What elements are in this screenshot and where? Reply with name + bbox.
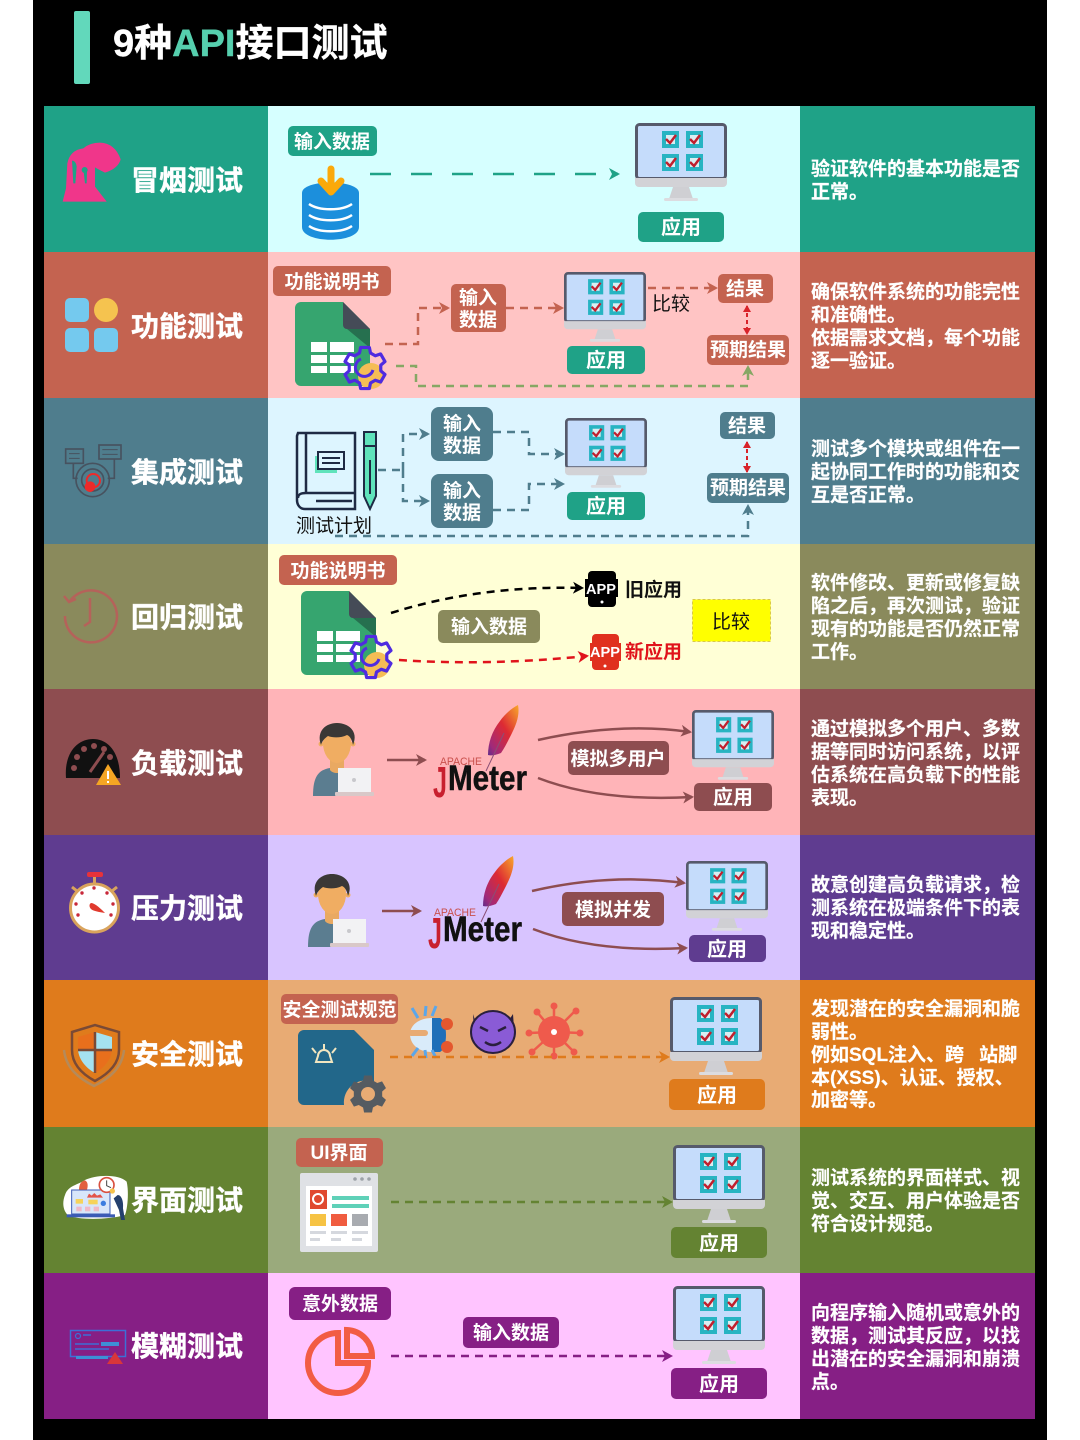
heading: 界面测试 xyxy=(131,1185,243,1216)
description: 现和稳定性。 xyxy=(811,919,925,942)
icon: security doc xyxy=(298,1030,386,1112)
icon: virus xyxy=(526,1002,584,1060)
icon: monitor xyxy=(673,1146,765,1223)
label: 应用: 应用 xyxy=(586,494,626,518)
logo: Apache JMeter: APACHE xyxy=(440,756,482,768)
icon: monitor xyxy=(565,419,647,488)
label: 意外数据 xyxy=(289,1287,391,1320)
label: 输入数据 1: 输入 xyxy=(443,412,481,435)
icon: bug xyxy=(408,1006,453,1058)
label: 应用: 应用 xyxy=(586,348,626,372)
row: 冒烟测试 xyxy=(44,106,1035,252)
arrow: spec to expected xyxy=(396,366,748,386)
icon: monitor xyxy=(670,998,762,1075)
label: 预期结果 xyxy=(707,335,789,365)
label: 输入数据 xyxy=(463,1317,559,1348)
icon: new app phone xyxy=(590,634,621,670)
description: 现有的功能是否仍然正常 xyxy=(811,617,1020,640)
description: 例如SQL注入、跨 站脚 xyxy=(811,1045,1017,1066)
label: 预期结果 xyxy=(707,473,789,503)
logo: Apache JMeter: J xyxy=(433,758,447,807)
label: 应用: 应用 xyxy=(661,215,701,239)
icon: monitor xyxy=(692,711,774,780)
icon: gauge with warning xyxy=(66,739,121,785)
label: 模拟并发 xyxy=(562,892,664,926)
icon: monitor xyxy=(635,124,727,201)
label: 模拟多用户 xyxy=(568,741,669,775)
arrow xyxy=(391,1355,671,1357)
arrow: app to result xyxy=(648,287,716,289)
row: 集成测试 xyxy=(44,398,1035,544)
arrow: input to app xyxy=(506,307,562,309)
heading: 负载测试 xyxy=(131,748,243,779)
arrow: plan branches xyxy=(378,434,428,501)
label: UI界面 xyxy=(296,1138,383,1167)
description: 测试多个模块或组件在一 xyxy=(811,437,1020,460)
label: 输入数据 2 xyxy=(431,474,493,528)
icon: old app phone: APP xyxy=(586,581,616,598)
logo: Apache JMeter xyxy=(433,705,527,807)
label: 输入数据: 输入 xyxy=(459,286,497,309)
label: 输入数据 xyxy=(451,284,506,332)
arrow xyxy=(370,173,618,175)
label: 输入数据: 输入数据 xyxy=(473,1321,549,1344)
icon: clock rewind xyxy=(64,590,117,642)
icon: integration xyxy=(66,445,121,497)
description: 逐一验证。 xyxy=(811,349,906,372)
arrow: compare xyxy=(746,442,748,472)
row: 负载测试 xyxy=(44,689,1035,835)
arrow xyxy=(390,1056,668,1058)
row: 界面测试 xyxy=(44,1127,1035,1273)
icon: user with laptop xyxy=(313,723,374,796)
description: 加密等。 xyxy=(811,1088,887,1111)
arrow: to new app xyxy=(399,656,587,662)
label: 应用 xyxy=(671,1227,767,1258)
description: 弱性。 xyxy=(811,1021,868,1043)
label: 结果 xyxy=(720,412,775,439)
label: 应用 xyxy=(638,212,724,242)
row: 安全测试 xyxy=(44,980,1035,1127)
label: 意外数据: 意外数据 xyxy=(302,1292,378,1315)
icon: old app phone xyxy=(585,571,618,607)
heading: 冒烟测试 xyxy=(131,165,243,196)
label: 结果: 结果 xyxy=(728,415,766,437)
description: 数据，测试其反应，以找 xyxy=(811,1324,1020,1347)
icon: blocks xyxy=(65,298,118,352)
logo: Apache JMeter: APACHE xyxy=(434,907,476,919)
label: 应用 xyxy=(689,935,766,962)
description: 依据需求文档，每个功能 xyxy=(811,326,1020,349)
description: 出潜在的安全漏洞和崩溃 xyxy=(811,1347,1020,1370)
logo: Apache JMeter: Meter xyxy=(448,759,527,798)
description: 验证软件的基本功能是否 xyxy=(811,157,1020,180)
label: 应用 xyxy=(567,492,645,520)
icon: shield xyxy=(64,1025,124,1086)
label: 模拟并发: 模拟并发 xyxy=(575,898,651,921)
label: 安全测试规范 xyxy=(281,994,398,1024)
description: 发现潜在的安全漏洞和脆 xyxy=(811,997,1020,1020)
label: 应用 xyxy=(671,1368,767,1399)
description: 软件修改、更新或修复缺 xyxy=(811,571,1020,594)
label: 旧应用: 旧应用 xyxy=(625,578,682,601)
icon: user with laptop xyxy=(308,874,369,947)
arrow: spec to input xyxy=(385,308,448,344)
icon: pie chart xyxy=(308,1330,372,1393)
arrow: user to JMeter xyxy=(382,910,420,912)
description: 互是否正常。 xyxy=(811,484,925,506)
heading: 安全测试 xyxy=(131,1039,243,1070)
heading: 集成测试 xyxy=(131,457,243,488)
description: 通过模拟多个用户、多数 xyxy=(811,717,1020,740)
label: 测试计划: 测试计划 xyxy=(296,515,372,537)
heading: 回归测试 xyxy=(131,602,243,633)
logo: Apache JMeter: Meter xyxy=(443,910,522,949)
description: 测试系统的界面样式、视 xyxy=(811,1166,1020,1189)
description: 陷之后，再次测试，验证 xyxy=(811,594,1020,617)
arrow: user to JMeter xyxy=(387,759,425,761)
description: 本(XSS)、认证、授权、 xyxy=(811,1067,1014,1089)
icon: smoking factory xyxy=(63,143,121,202)
label: 功能说明书 xyxy=(273,266,391,296)
arrow: to old app xyxy=(391,588,582,613)
description: 觉、交互、用户体验是否 xyxy=(811,1189,1020,1212)
description: 估系统在高负载下的性能 xyxy=(811,763,1020,786)
arrow: lower path xyxy=(538,778,692,798)
label: 应用 xyxy=(694,783,772,811)
description: 和准确性。 xyxy=(811,304,906,326)
label: 应用 xyxy=(669,1079,765,1110)
label: 结果 xyxy=(718,274,773,303)
arrow: compare xyxy=(746,306,748,334)
label: 应用: 应用 xyxy=(697,1083,737,1107)
icon: database xyxy=(302,169,359,240)
label: 比较: 比较 xyxy=(712,611,750,633)
description: 符合设计规范。 xyxy=(811,1213,944,1235)
title text: 9种API接口测试 xyxy=(113,23,388,65)
description: 起协同工作时的功能和交 xyxy=(811,460,1020,483)
label: 应用: 应用 xyxy=(699,1372,739,1396)
icon: title accent bar xyxy=(74,11,90,84)
label: 输入数据: 输入数据 xyxy=(294,130,370,153)
label: 模拟多用户: 模拟多用户 xyxy=(570,747,666,770)
row: 压力测试 xyxy=(44,835,1035,980)
icon: spec sheet xyxy=(301,591,391,678)
description: 测系统在极端条件下的表 xyxy=(811,896,1020,919)
arrow: lower path xyxy=(533,929,686,949)
title xyxy=(74,11,388,84)
arrow: plan to expected xyxy=(335,506,748,536)
arrow: upper path xyxy=(532,879,684,891)
description: 向程序输入随机或意外的 xyxy=(811,1301,1020,1324)
label: 输入数据 1 xyxy=(431,407,493,461)
icon: test plan book xyxy=(297,432,376,509)
icon: monitor xyxy=(564,273,646,342)
heading: 功能测试 xyxy=(131,311,243,342)
arrow xyxy=(391,1201,671,1203)
icon: stopwatch xyxy=(70,872,118,932)
label: 比较 xyxy=(692,600,770,642)
label: 预期结果: 预期结果 xyxy=(710,339,786,361)
label: 安全测试规范: 安全测试规范 xyxy=(282,998,396,1021)
label: 输入数据 xyxy=(438,610,540,643)
arrow: upper path xyxy=(538,728,690,740)
description: 故意创建高负载请求，检 xyxy=(811,873,1020,896)
label: 预期结果: 预期结果 xyxy=(710,477,786,499)
row: 模糊测试 xyxy=(44,1273,1035,1419)
icon: monitor xyxy=(686,862,768,931)
label: 功能说明书 xyxy=(279,555,397,585)
icon: new app phone: APP xyxy=(590,644,620,661)
heading: 压力测试 xyxy=(131,893,243,924)
label: 输入数据: 数据 xyxy=(459,309,497,331)
label: 输入数据 1: 数据 xyxy=(443,435,481,457)
label: 输入数据: 输入数据 xyxy=(451,615,527,638)
description: 表现。 xyxy=(811,787,868,809)
icon: UI laptop xyxy=(63,1176,128,1220)
label: 比较: 比较 xyxy=(652,293,690,315)
row: 功能测试 xyxy=(44,252,1035,398)
label: 应用: 应用 xyxy=(713,785,753,809)
arrow: inputs to app xyxy=(493,432,563,510)
label: 新应用: 新应用 xyxy=(625,640,682,663)
heading: 模糊测试 xyxy=(131,1331,243,1362)
label: 功能说明书: 功能说明书 xyxy=(290,560,386,582)
label: 功能说明书: 功能说明书 xyxy=(284,271,380,293)
label: 结果: 结果 xyxy=(726,278,764,300)
label: 输入数据 2: 数据 xyxy=(443,502,481,524)
logo: Apache JMeter xyxy=(428,856,522,958)
description: 工作。 xyxy=(811,641,868,663)
icon: monitor xyxy=(673,1288,765,1364)
label: 输入数据 2: 输入 xyxy=(443,479,481,502)
row: 回归测试 xyxy=(44,544,1035,689)
label: 应用 xyxy=(567,346,645,374)
description: 据等同时访问系统，以评 xyxy=(811,740,1020,763)
icon: fuzz screen with warning xyxy=(70,1330,126,1364)
description: 正常。 xyxy=(811,181,868,203)
label: UI界面: UI界面 xyxy=(310,1143,368,1164)
description: 确保软件系统的功能完性 xyxy=(811,280,1020,303)
label: 应用: 应用 xyxy=(699,1231,739,1255)
description: 点。 xyxy=(811,1371,849,1393)
logo: Apache JMeter: J xyxy=(428,909,442,958)
icon: UI window xyxy=(300,1173,378,1252)
icon: devil xyxy=(471,1011,515,1053)
label: 应用: 应用 xyxy=(707,937,747,961)
label: 输入数据 xyxy=(288,126,377,156)
icon: spec sheet xyxy=(295,302,385,389)
